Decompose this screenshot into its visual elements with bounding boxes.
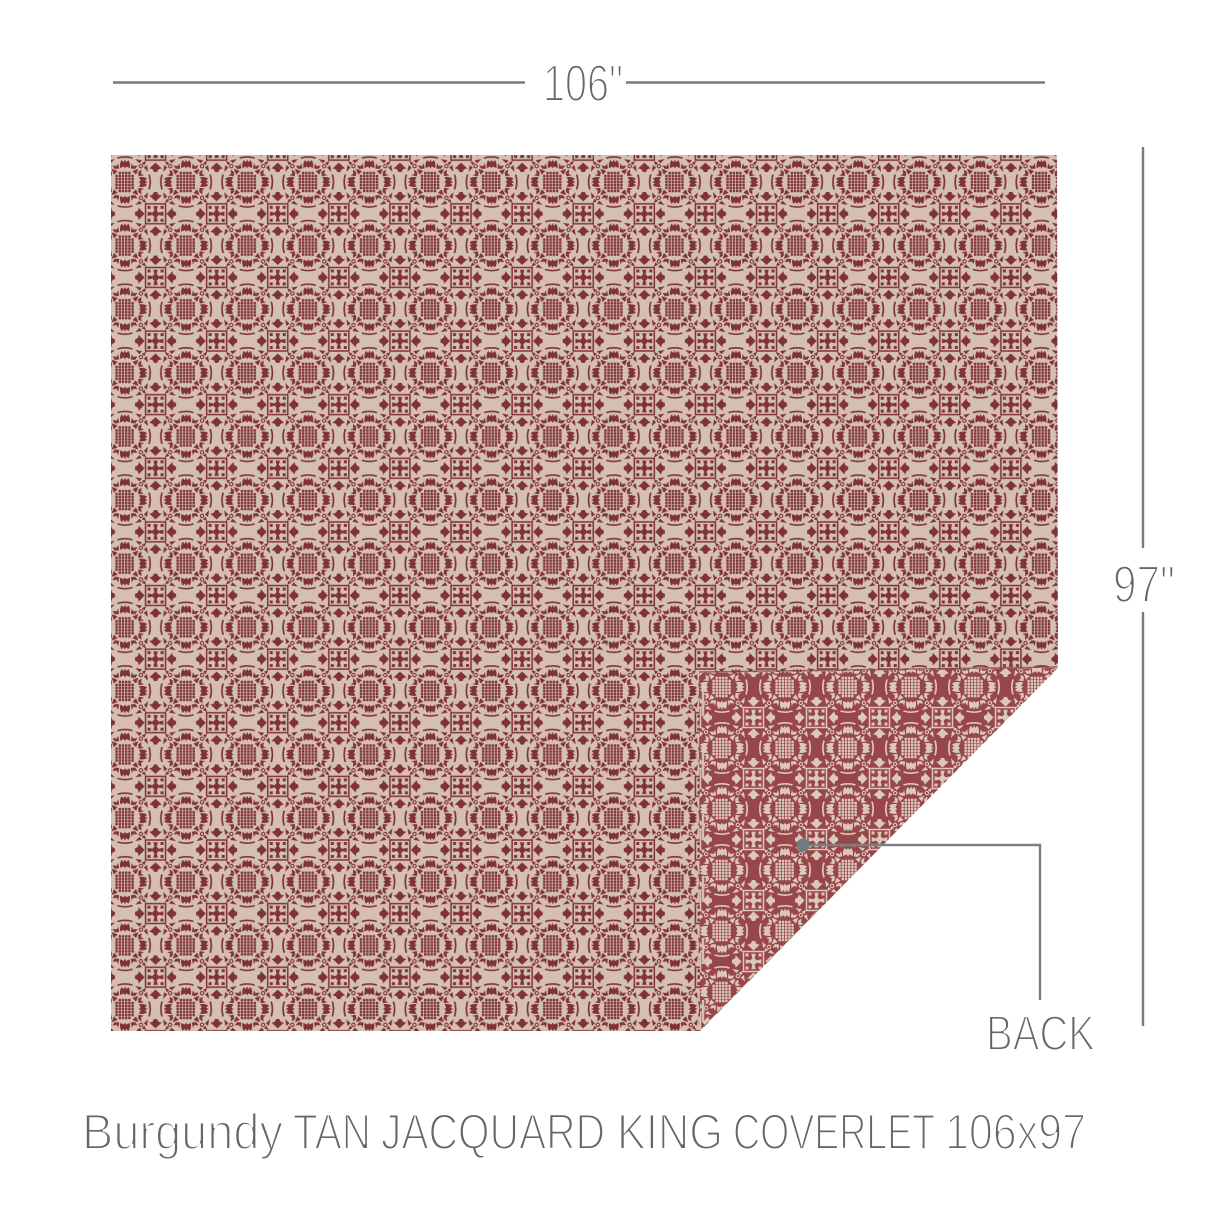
title: COVERLET xyxy=(733,1104,935,1160)
title xyxy=(82,1104,1086,1160)
panel: coverlet xyxy=(111,155,1058,1031)
folded corner showing back fabric xyxy=(699,667,1058,1030)
height label: 97" xyxy=(1113,556,1175,614)
callout label: BACK xyxy=(986,1007,1095,1061)
title: 106x97 xyxy=(945,1104,1086,1160)
title: TAN xyxy=(293,1104,371,1160)
callout: back fabric xyxy=(796,838,1095,1061)
title: JACQUARD xyxy=(381,1104,605,1160)
title: KING xyxy=(617,1104,723,1160)
width label: 106" xyxy=(543,55,623,113)
title: Burgundy xyxy=(82,1104,283,1160)
coverlet front fabric xyxy=(111,155,1058,1031)
